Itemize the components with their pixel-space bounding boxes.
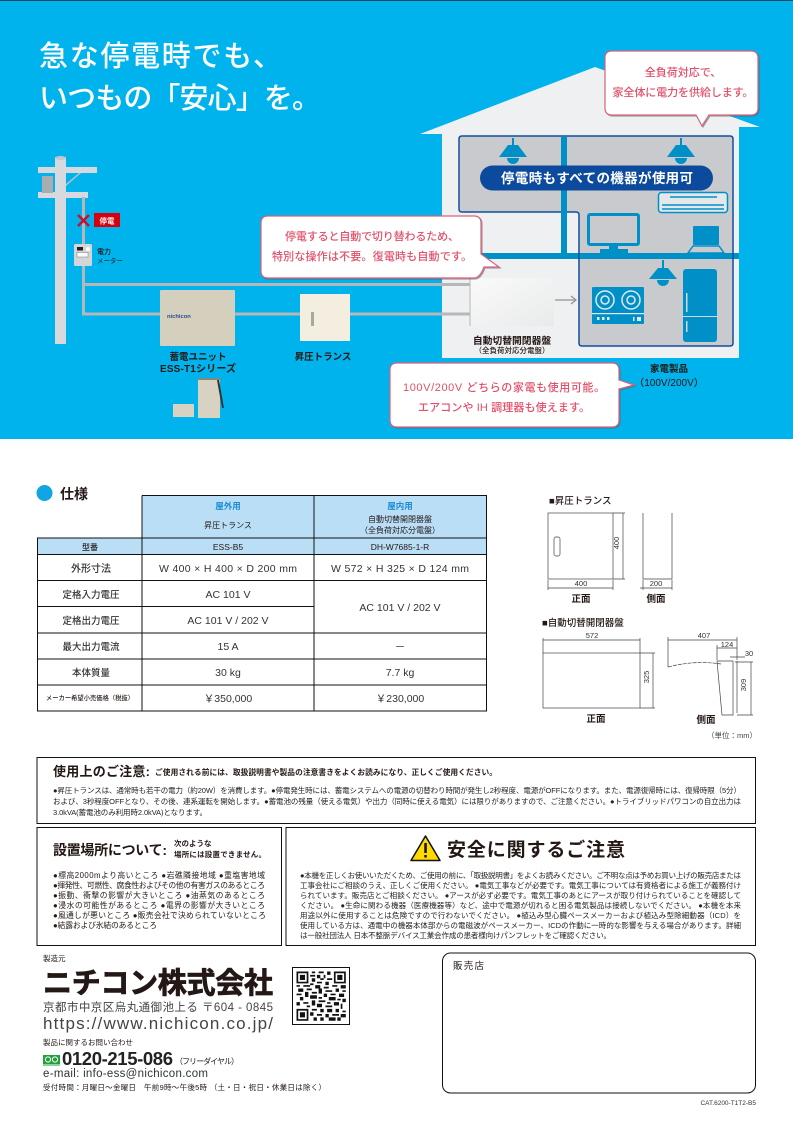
diagram: transformer dimensions: 側面: [646, 593, 666, 605]
panel: safety notes: 使用している方は、通電中の機器本体部からの電磁波がペースメーカー、ICDの作動に一時的な影響を与える場合があります。詳細: [300, 920, 741, 930]
table row labels: 外形寸法: [71, 562, 111, 575]
icon: outage cross: 停電: [100, 216, 115, 226]
panel: usage notes: 3.0kVA(蓄電池のみ利用時2.0kVA)となります。: [53, 807, 207, 817]
meter label: [97, 247, 123, 265]
table row labels: 本体質量: [72, 667, 110, 679]
meter label: メーター: [97, 256, 123, 265]
catalog number: CAT.6200-T1T2-B5: [700, 1100, 756, 1107]
diagram: transformer dimensions: 400: [575, 579, 587, 588]
icon: electricity meter: [74, 244, 92, 266]
table values: AC 101 V / 202 V: [359, 602, 441, 614]
contact block: 0120-215-086: [62, 1048, 173, 1069]
title: [39, 40, 321, 115]
storage unit: [160, 290, 235, 346]
panel: installation location: ●標高2000mより高いところ ●岩礁隣接地域 ●重塩害地域: [53, 870, 265, 880]
table header: （全負荷対応分電盤）: [360, 525, 440, 535]
icon: refrigerator: [683, 269, 717, 342]
table row labels: [46, 562, 134, 702]
contact block: e-mail: info-ess@nichicon.com: [43, 1068, 208, 1080]
panel: usage notes: 使用上のご注意:: [53, 764, 150, 779]
icon: laptop: [688, 226, 724, 253]
appliances label: （100V/200V）: [634, 377, 704, 389]
icon: air conditioner: [658, 192, 728, 212]
specification table: [38, 496, 486, 711]
house: [420, 67, 760, 358]
storage unit label: [160, 351, 236, 375]
diagram: transformer dimensions: 正面: [571, 594, 591, 605]
icon: outage cross: [78, 213, 120, 227]
manufacturer block: [43, 953, 273, 1033]
panel: blue hero: [0, 0, 793, 439]
diagram: transformer dimensions: ■昇圧トランス: [549, 496, 612, 507]
diagram: distribution panel dimensions: 正面: [586, 714, 606, 725]
callout: auto switching: [261, 216, 499, 278]
table row labels: 定格出力電圧: [62, 615, 120, 627]
storage unit: nichicon: [167, 314, 191, 320]
panel: safety notes: ください。 ●生命に関わる機器（医療機器等）など、途中で電源が切れると困る電気製品は接続しないでください。 ●本機を本来: [300, 900, 742, 910]
battery and controller: [173, 378, 223, 418]
step-up transformer: [300, 294, 350, 341]
table values: ￥230,000: [376, 693, 424, 705]
icon: ceiling lamp left: [499, 138, 527, 164]
icon: free dial: [43, 1055, 60, 1066]
callout: whole house: 家全体に電力を供給します。: [612, 85, 754, 99]
callout: whole house: 全負荷対応で、: [645, 65, 721, 79]
icon: ceiling lamp right: [667, 138, 695, 164]
contact block: （フリーダイヤル）: [175, 1056, 239, 1066]
table values: ￥350,000: [204, 693, 252, 705]
table header: 型番: [82, 542, 98, 552]
panel: safety notes: られています。販売店とご相談ください。 ●アースが必ず必要です。電気工事のあとにアースが取り付けられていることを確認して: [300, 890, 741, 900]
storage unit label: ESS-T1シリーズ: [160, 362, 236, 375]
heading: specifications: 仕様: [60, 486, 88, 502]
table values: 15 A: [217, 641, 239, 653]
panel: safety notes: [286, 828, 756, 946]
panel: safety notes: 用途以外に使用することは危険ですので行わないでください。 ●植込み型心臓ペースメーカーおよび植込み型除細動器（ICD）を: [300, 910, 741, 920]
contact block: 製品に関するお問い合わせ: [43, 1037, 133, 1047]
diagram: distribution panel dimensions: 側面: [696, 714, 716, 726]
table header: 屋内用: [387, 501, 413, 511]
panel: installation location: 設置場所について:: [53, 842, 167, 858]
table values: AC 101 V / 202 V: [187, 615, 269, 627]
distribution panel: [470, 278, 554, 326]
diagram: distribution panel dimensions: （単位：mm）: [707, 730, 757, 740]
panel: usage notes: ●昇圧トランスは、通常時も若干の電力（約20W）を消費します。●停電発生時には、蓄電システムへの電源の切替わり時間が発生し2秒程度、電源がOFFになります。また、電源復帰時には、復帰時限（5分）: [53, 785, 741, 795]
table header: ESS-B5: [213, 542, 243, 552]
diagram: distribution panel dimensions: ■自動切替開閉器盤: [542, 617, 624, 629]
table values: [159, 563, 469, 705]
status pill: 停電時もすべての機器が使用可: [501, 170, 693, 186]
panel: usage notes: [37, 758, 756, 824]
icon: television: [588, 214, 638, 253]
diagram: transformer dimensions: 400: [612, 537, 621, 549]
diagram: distribution panel dimensions: 30: [745, 649, 753, 658]
appliances label: [634, 363, 704, 389]
panel: usage notes: ご使用される前には、取扱説明書や製品の注意書きをよくお読みになり、正しくご使用ください。: [155, 767, 497, 777]
callout: voltage: [390, 363, 634, 427]
manufacturer block: ニチコン株式会社: [43, 967, 273, 1000]
callout: voltage: 100V/200V どちらの家電も使用可能。: [403, 380, 605, 394]
diagram: distribution panel dimensions: [542, 617, 757, 740]
manufacturer block: 京都市中京区烏丸通御池上る 〒604 - 0845: [43, 1000, 273, 1014]
table values: 7.7 kg: [386, 667, 414, 679]
diagram: distribution panel dimensions: 309: [739, 679, 748, 691]
status pill: [480, 166, 713, 190]
distribution panel label: （全負荷対応分電盤）: [474, 345, 550, 355]
manufacturer block: https://www.nichicon.co.jp/: [43, 1014, 273, 1033]
meter label: 電力: [97, 247, 111, 256]
panel: installation location: ●振動、衝撃の影響が大きいところ ●油蒸気のあるところ: [53, 890, 265, 900]
table row labels: 最大出力電流: [62, 641, 120, 653]
distribution panel label: 自動切替開閉器盤: [473, 334, 551, 347]
table header: 自動切替開閉器盤: [368, 514, 432, 524]
icon: induction cooker: [592, 287, 644, 324]
house frame: [442, 137, 739, 259]
panel: safety notes: ●本機を正しくお使いいただくため、ご使用の前に、「取扱説明書」をよくお読みください。ご不明な点は予めお買い上げの販売店または: [300, 870, 742, 880]
diagram: distribution panel dimensions: 124: [721, 640, 733, 649]
diagram: transformer dimensions: 200: [650, 579, 662, 588]
table values: W 572 × H 325 × D 124 mm: [331, 563, 469, 575]
table values: AC 101 V: [206, 589, 250, 601]
transformer label: 昇圧トランス: [295, 352, 351, 363]
icon: warning triangle: [411, 836, 440, 860]
panel: installation location: 場所には設置できません。: [174, 849, 266, 859]
diagram: distribution panel dimensions: 407: [698, 631, 710, 640]
storage unit label: 蓄電ユニット: [169, 351, 227, 363]
callout: auto switching: 停電すると自動で切り替わるため、: [285, 229, 459, 243]
panel: usage notes: および、3秒程度OFFとなり、その後、連系運転を開始します。●蓄電池の残量（使える電気）や出力（同時に使える電気）には限りがありますので、ご注意ください。●トライブリッドパワコンの自立出力は: [53, 796, 742, 806]
table header: 昇圧トランス: [204, 521, 252, 530]
appliances label: 家電製品: [650, 363, 688, 375]
title: いつもの「安心」を。: [39, 82, 321, 115]
panel: installation location: ●結露および氷結のあるところ: [53, 920, 157, 930]
utility pole: [38, 156, 97, 344]
panel: safety notes: 工事会社にご相談のうえ、正しくご使用ください。 ●電気工事などが必要です。電気工事については有資格者による施工が義務付け: [300, 880, 741, 890]
table header: DH-W7685-1-R: [371, 542, 429, 552]
manufacturer block: 製造元: [43, 953, 66, 963]
heading: specifications: [36, 485, 88, 502]
callout: voltage: エアコンや IH 調理器も使えます。: [418, 400, 590, 414]
panel: installation location: [37, 828, 282, 946]
arrow: [555, 296, 576, 304]
title: 急な停電時でも、: [39, 40, 282, 73]
table values: －: [395, 641, 405, 653]
diagram: distribution panel dimensions: 325: [642, 671, 651, 683]
diagram: transformer dimensions: [548, 496, 672, 605]
table values: 30 kg: [215, 667, 241, 679]
panel: installation location: ●風通しが悪いところ ●販売会社で決められていないところ: [53, 910, 266, 920]
diagram: distribution panel dimensions: 572: [586, 631, 598, 640]
house rooms: [459, 136, 733, 346]
callout: auto switching: 特別な操作は不要。復電時も自動です。: [272, 249, 472, 263]
QR code: [292, 968, 350, 1024]
panel: dealer box: [442, 953, 756, 1093]
wires entering house: [442, 284, 470, 314]
panel: safety notes: は一般社団法人 日本不整脈デバイス工業会作成の患者様向けパンフレットをご確認ください。: [300, 930, 611, 940]
callout: whole house: [605, 51, 758, 126]
panel: installation location: ●揮発性、可燃性、腐食性およびその他の有害ガスのあるところ: [53, 880, 265, 890]
panel: dealer box: 販売店: [453, 960, 484, 972]
contact block: [43, 1037, 326, 1092]
icon: ceiling lamp lower: [649, 260, 677, 286]
room outline over floor: [579, 253, 733, 259]
distribution panel label: [473, 334, 551, 355]
table header: 屋外用: [215, 501, 241, 511]
table values: W 400 × H 400 × D 200 mm: [159, 563, 297, 575]
wires: [84, 197, 470, 314]
panel: installation location: ●浸水の可能性があるところ ●電界の影響が大きいところ: [53, 900, 265, 910]
contact block: 受付時間：月曜日～金曜日 午前9時～午後5時 （土・日・祝日・休業日は除く）: [43, 1082, 326, 1092]
panel: installation location: 次のような: [174, 838, 212, 848]
table row labels: 定格入力電圧: [62, 589, 120, 601]
table header: [82, 501, 440, 552]
table row labels: メーカー希望小売価格（税抜）: [46, 693, 134, 702]
panel: safety notes: 安全に関するご注意: [447, 838, 625, 861]
